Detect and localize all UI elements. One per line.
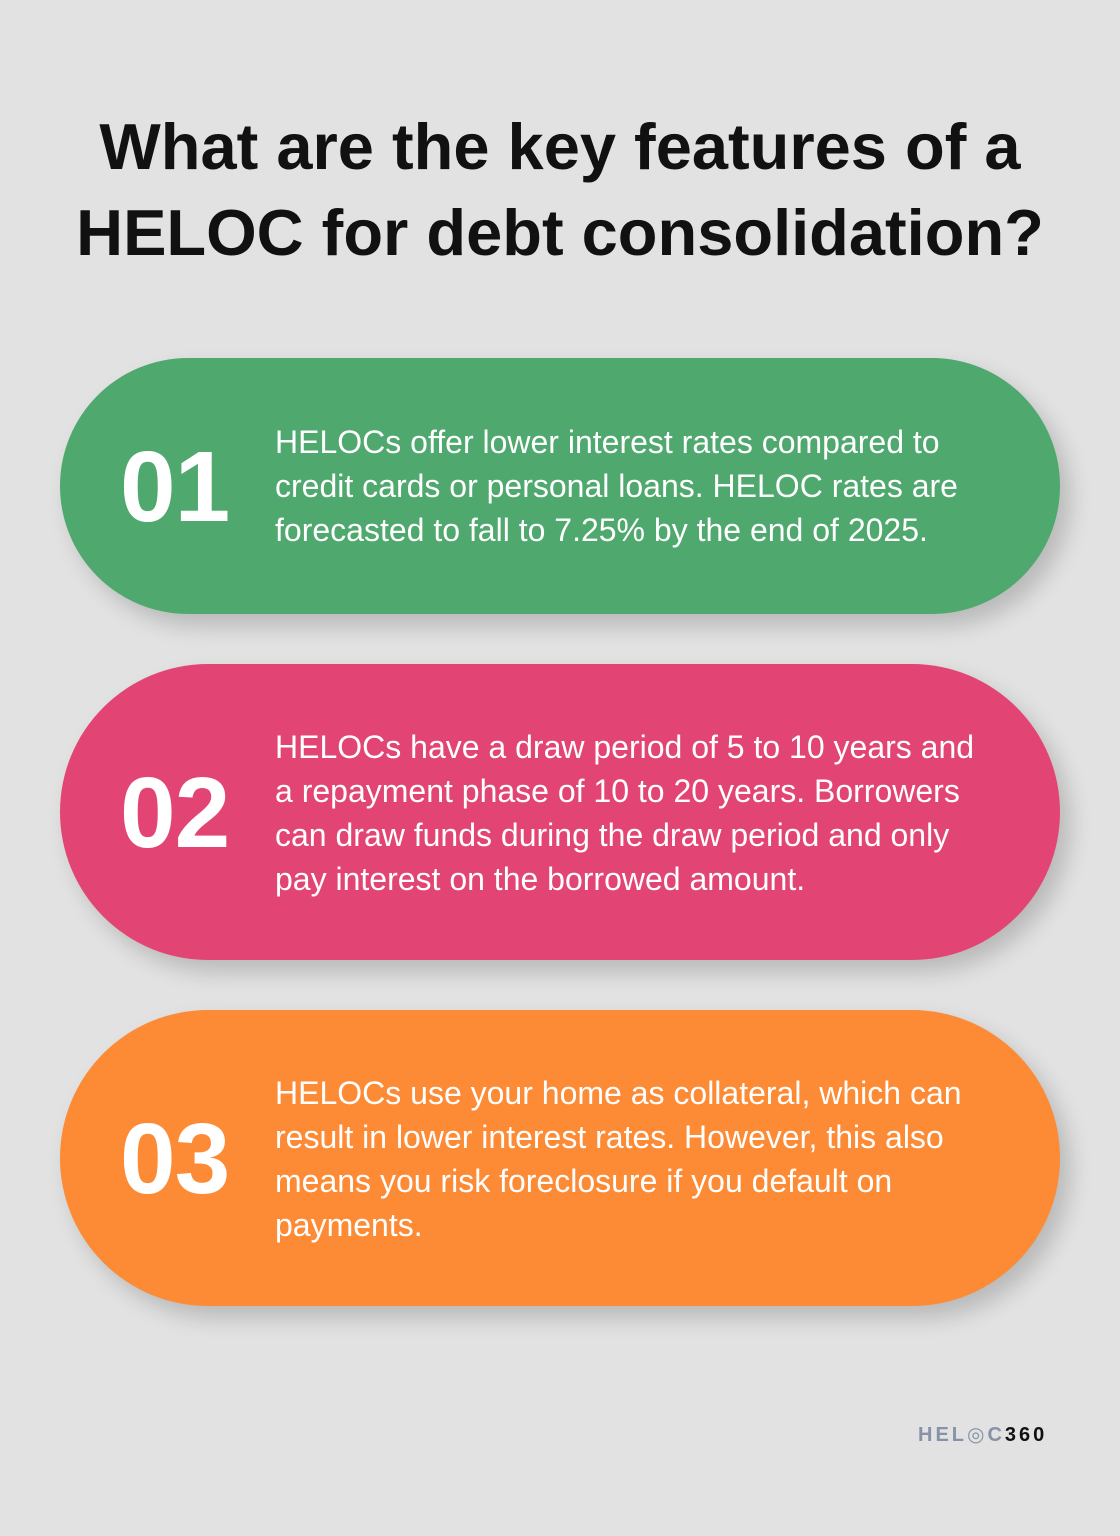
- number 02: 02: [120, 757, 229, 869]
- text 3: HELOCs use your home as collateral, which can result in lower interest rates. However, this also means you risk foreclosure if you default on payments.: [275, 1075, 962, 1243]
- title: HELOC for debt consolidation?: [76, 196, 1044, 269]
- title: [76, 110, 1044, 269]
- number 01: 01: [120, 431, 229, 543]
- text 2: HELOCs have a draw period of 5 to 10 years and: [275, 729, 974, 765]
- title: What are the key features of a: [99, 110, 1021, 183]
- number 03: 03: [120, 1103, 229, 1215]
- logo: HEL◎C360: [918, 1424, 1047, 1446]
- card 2: [60, 664, 1060, 960]
- card 1: [60, 358, 1060, 614]
- text 1: HELOCs offer lower interest rates compared to credit cards or personal loans. HELOC rates are forecasted to fall to 7.25% by the end of 2025.: [275, 424, 958, 548]
- card 3: [60, 1010, 1060, 1306]
- text 2: a repayment phase of 10 to 20 years. Borrowers can draw funds during the draw period and only pay interest on the borrowed amount.: [275, 773, 960, 897]
